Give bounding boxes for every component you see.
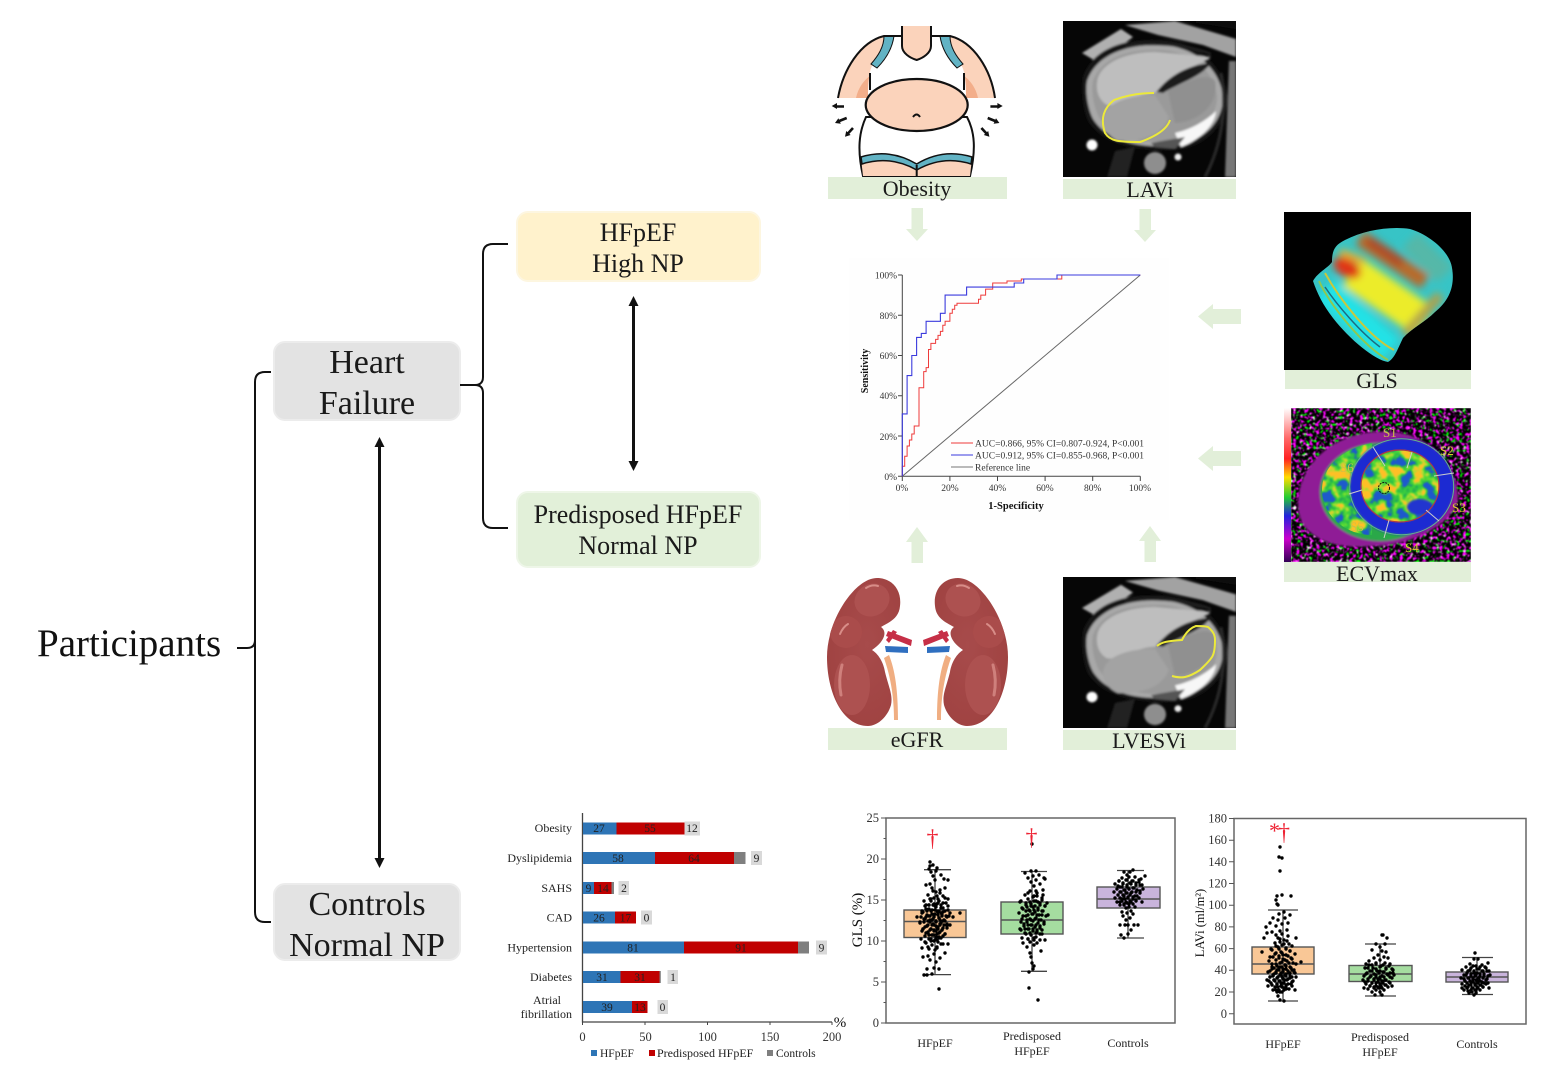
box: Heart Failure: Heart [329, 344, 405, 381]
image: ECV map: S4 [1405, 540, 1419, 555]
chart: LAVi box plot: HFpEF [1265, 1037, 1301, 1051]
bar: Diabetes: 1 [670, 972, 676, 984]
legend: comorbidity groups [591, 1046, 816, 1060]
bar: Dyslipidemia: Dyslipidemia [507, 851, 573, 865]
icon: kidneys [827, 577, 1008, 726]
box: GLS Controls [1097, 870, 1160, 938]
chart: ROC curves: 100% [1129, 484, 1151, 494]
chart: GLS box plot: Predisposed [1003, 1029, 1061, 1043]
chart: LAVi box plot: 0 [1221, 1007, 1227, 1021]
bar: Obesity: 55 [644, 823, 656, 835]
image: ECV map: S2 [1440, 443, 1454, 458]
chart: comorbidity stacked bars: 100 [698, 1030, 717, 1044]
arrow: LVESVi to ROC [1139, 526, 1161, 562]
chart: GLS box plot: GLS (%) [850, 893, 866, 947]
box: GLS HFpEF: † [926, 826, 938, 852]
chart: GLS box plot: 5 [873, 975, 879, 989]
chart: ROC curves: 100% [875, 272, 897, 282]
chart: ROC curves: 40% [880, 392, 897, 402]
bar: Obesity: Obesity [535, 821, 572, 835]
chart: ROC curves: 80% [1084, 484, 1101, 494]
chart: ROC curves: 1-Specificity [988, 501, 1044, 512]
chart: ROC curves: 20% [880, 433, 897, 443]
box: HFpEF High NP: HFpEF [600, 218, 676, 247]
chart: LAVi box plot: 20 [1214, 985, 1227, 999]
label: eGFR [828, 727, 1007, 752]
arrow: GLS to ROC [1198, 304, 1241, 329]
title: Participants: Participants [37, 622, 221, 665]
bar: CAD: CAD [547, 910, 572, 924]
bar: Diabetes: Diabetes [530, 970, 572, 984]
bar: Hypertension: 91 [735, 942, 747, 954]
label: GLS [1285, 368, 1471, 393]
chart: ROC curves: 20% [941, 484, 959, 494]
bar: Hypertension [507, 940, 827, 954]
box: LAVi HFpEF [1252, 818, 1314, 1001]
image: GLS 3D strain map [1284, 212, 1471, 370]
chart: LAVi box plot: 100 [1208, 898, 1227, 912]
box: Controls Normal NP: Normal NP [289, 927, 445, 964]
image: ECV map: S1 [1383, 425, 1397, 440]
box: Predisposed HFpEF Normal NP: Predisposed HFpEF [534, 500, 742, 529]
image: ECV map [1284, 408, 1471, 562]
bar: Diabetes: 31 [634, 972, 646, 984]
bar: SAHS [541, 881, 629, 895]
chart: comorbidity stacked bars: 200 [823, 1030, 841, 1044]
legend: comorbidity groups: Predisposed HFpEF [657, 1046, 754, 1060]
legend: comorbidity groups: Controls [776, 1048, 816, 1060]
image: LVESVi cardiac MRI [1063, 577, 1236, 728]
bar: Dyslipidemia: 64 [688, 853, 700, 865]
chart: GLS box plot [850, 811, 1175, 1058]
chart: ROC curves: 60% [1036, 484, 1054, 494]
bar: Diabetes: 31 [596, 972, 608, 984]
chart: LAVi box plot [1193, 812, 1526, 1059]
chart: LAVi box plot: 140 [1208, 855, 1227, 869]
chart: GLS box plot: 0 [873, 1016, 879, 1030]
bar: CAD: 0 [644, 912, 650, 924]
chart: comorbidity stacked bars: 150 [761, 1030, 779, 1044]
chart: comorbidity stacked bars: 0 [579, 1030, 586, 1044]
chart: comorbidity stacked bars [507, 813, 846, 1060]
bar: SAHS: 9 [586, 883, 592, 895]
chart: GLS box plot: Controls [1107, 1036, 1149, 1050]
chart: GLS box plot: 25 [866, 811, 879, 825]
chart: LAVi box plot: 120 [1208, 876, 1227, 890]
box: Heart Failure: Failure [319, 385, 415, 422]
box: Heart Failure [274, 342, 460, 422]
box: Controls Normal NP: Controls [308, 886, 426, 923]
chart: ROC curves: Sensitivity [860, 349, 871, 393]
arrow: obesity to ROC [906, 208, 928, 241]
chart: LAVi box plot: 180 [1208, 812, 1227, 826]
label: LVESVi [1063, 728, 1236, 753]
chart: ROC curves [849, 258, 1169, 520]
box: LAVi HFpEF: * [1269, 818, 1280, 843]
label: LVESVi: LVESVi [1112, 728, 1186, 753]
chart: ROC curves: 0% [884, 473, 897, 483]
arrow: LAVi to ROC [1134, 209, 1156, 242]
chart: GLS box plot: HFpEF [917, 1036, 953, 1050]
chart: LAVi box plot: 60 [1214, 942, 1227, 956]
box: GLS HFpEF [904, 826, 966, 989]
box: GLS Predisposed HFpEF: † [1026, 825, 1038, 851]
label: Obesity: Obesity [883, 176, 951, 201]
chart: ROC curves: 0% [896, 484, 908, 494]
arrow: ECVmax to ROC [1198, 446, 1241, 471]
bar: Hypertension: Hypertension [507, 940, 572, 954]
arrow: heart failure versus controls [374, 437, 384, 868]
bar: CAD [547, 910, 652, 924]
image: ECV map: S5 [1350, 519, 1364, 534]
legend: comorbidity groups: HFpEF [600, 1048, 634, 1060]
chart: comorbidity stacked bars: % [834, 1015, 846, 1031]
bar: Dyslipidemia [507, 851, 762, 865]
bar: Atrial fibrillation: fibrillation [521, 1007, 572, 1021]
bar: Atrial fibrillation [521, 993, 668, 1021]
chart: GLS box plot: 20 [866, 852, 879, 866]
label: LAVi [1063, 177, 1236, 202]
chart: ROC curves: 80% [880, 312, 897, 322]
label: eGFR: eGFR [891, 727, 944, 752]
box: Predisposed HFpEF Normal NP [517, 492, 760, 567]
bar: Dyslipidemia: 9 [754, 853, 760, 865]
arrow: eGFR to ROC [906, 527, 928, 563]
bar: Dyslipidemia: 58 [612, 853, 624, 865]
box: Predisposed HFpEF Normal NP: Normal NP [578, 531, 698, 560]
box: HFpEF High NP: High NP [592, 249, 684, 278]
box: Controls Normal NP [274, 884, 460, 964]
chart: ROC curves: 40% [989, 484, 1006, 494]
image: ECV map: S6 [1340, 460, 1354, 475]
chart: LAVi box plot: 80 [1214, 920, 1227, 934]
bar: Hypertension: 9 [819, 942, 825, 954]
bar: Obesity: 12 [686, 823, 698, 835]
chart: comorbidity stacked bars: 50 [639, 1030, 652, 1044]
bar: Diabetes [530, 970, 678, 984]
chart: ROC curves: AUC=0.912, 95% CI=0.855-0.968, P<0.001 [975, 452, 1144, 462]
chart: LAVi box plot: 40 [1214, 963, 1227, 977]
box: LAVi HFpEF: † [1278, 820, 1290, 846]
label: ECVmax [1284, 561, 1471, 586]
bar: Hypertension: 81 [627, 942, 639, 954]
bar: CAD: 17 [620, 912, 632, 924]
bar: Obesity: 27 [593, 823, 605, 835]
chart: LAVi box plot: 160 [1208, 833, 1227, 847]
chart: GLS box plot: 15 [866, 893, 879, 907]
bar: Atrial fibrillation: 0 [660, 1002, 666, 1014]
arrow: HFpEF versus predisposed [628, 296, 638, 471]
label: ECVmax: ECVmax [1336, 561, 1418, 586]
image: ECV map: S3 [1452, 500, 1466, 515]
icon: obesity [832, 26, 1003, 177]
chart: LAVi box plot: HFpEF [1362, 1045, 1398, 1059]
box: HFpEF High NP [517, 212, 760, 281]
bar: Atrial fibrillation: 39 [601, 1002, 613, 1014]
chart: GLS box plot: HFpEF [1014, 1044, 1050, 1058]
box: GLS Predisposed HFpEF [1001, 825, 1063, 1000]
bar: SAHS: 14 [597, 883, 609, 895]
chart: LAVi box plot: Predisposed [1351, 1030, 1409, 1044]
bar: Obesity [535, 821, 700, 836]
chart: GLS box plot: 10 [866, 934, 879, 948]
bar: SAHS: 2 [621, 883, 627, 895]
label: LAVi: LAVi [1126, 177, 1174, 202]
bar: SAHS: SAHS [541, 881, 572, 895]
bracket: heart failure split [460, 244, 508, 528]
label: GLS: GLS [1356, 368, 1398, 393]
ROC curve: blue [902, 275, 1140, 476]
chart: ROC curves: AUC=0.866, 95% CI=0.807-0.924, P<0.001 [975, 440, 1144, 450]
chart: ROC curves: Reference line [975, 462, 1030, 474]
image: LAVi cardiac MRI [1063, 21, 1236, 177]
chart: LAVi box plot: LAVi (ml/m²) [1193, 889, 1207, 957]
chart: LAVi box plot: Controls [1456, 1037, 1498, 1051]
bar: Atrial fibrillation: 13 [634, 1002, 646, 1014]
ROC curve: red [902, 275, 1140, 476]
chart: ROC curves: 60% [880, 352, 897, 362]
bar: CAD: 26 [593, 912, 605, 924]
bracket: participants split [237, 372, 271, 922]
bar: Atrial fibrillation: Atrial [533, 993, 562, 1007]
box: LAVi Predisposed HFpEF [1349, 935, 1412, 996]
label: Obesity [828, 176, 1007, 201]
box: LAVi Controls [1446, 953, 1508, 995]
